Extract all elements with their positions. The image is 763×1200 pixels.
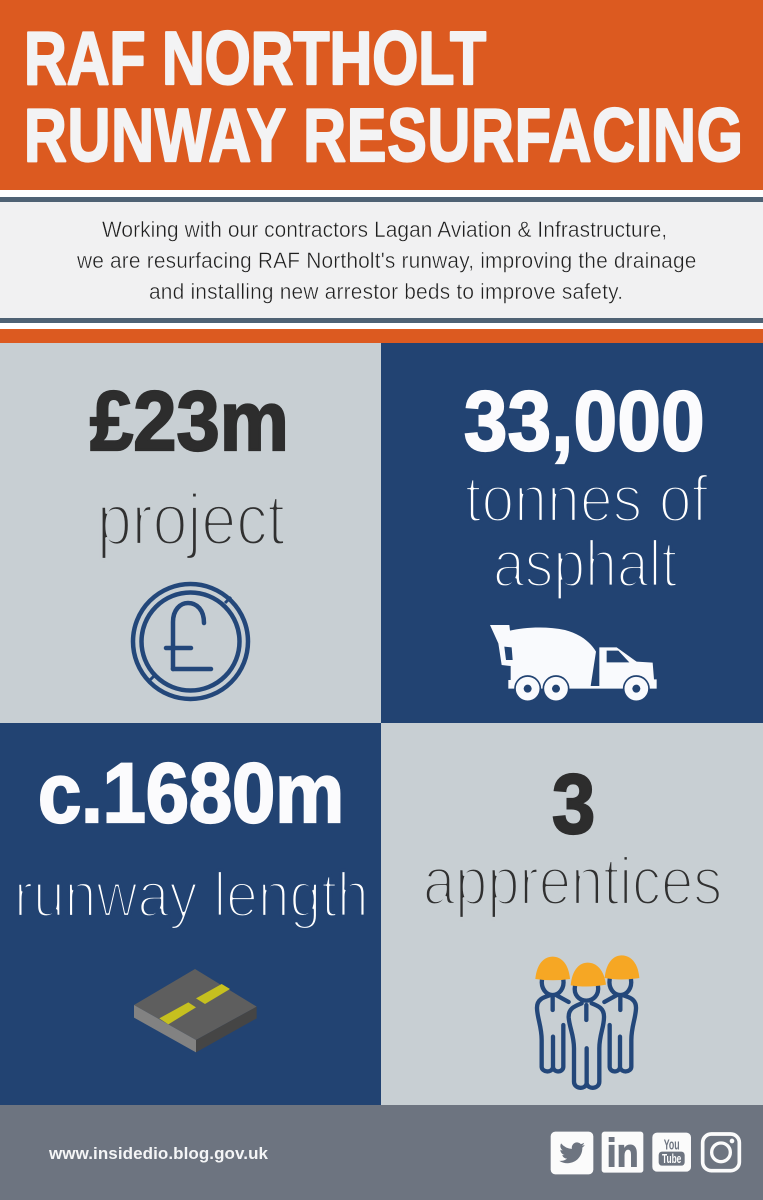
icon: twitter [551, 1132, 593, 1174]
icon: three workers in hard hats [535, 955, 639, 1088]
title: RUNWAY RESURFACING [24, 94, 743, 178]
panel: runway length [0, 723, 381, 1105]
label: tonnes of asphalt [465, 462, 709, 601]
icon: youtube: You [664, 1136, 680, 1153]
footer bar [0, 1105, 763, 1200]
icon: youtube [652, 1133, 691, 1172]
label: tonnes of asphalt: asphalt [493, 528, 677, 601]
social icons [551, 1132, 739, 1176]
title [24, 17, 743, 178]
website url: www.insidedio.blog.gov.uk [48, 1144, 269, 1163]
icon: linkedin: in [607, 1132, 639, 1176]
title: RAF NORTHOLT [24, 17, 486, 101]
intro text [76, 218, 696, 304]
intro text: and installing new arrestor beds to improve safety. [149, 280, 623, 304]
panel: apprentices [381, 723, 763, 1105]
label: tonnes of asphalt: tonnes of [465, 462, 709, 536]
icon: cement mixer truck [490, 625, 657, 701]
title banner [0, 0, 763, 190]
icon: pound coin [133, 584, 248, 699]
figure: 23m: £23m [90, 375, 289, 469]
label: project: project [97, 480, 285, 561]
icon: instagram [703, 1134, 739, 1171]
label: runway length: runway length [14, 860, 369, 930]
orange divider band [0, 329, 763, 343]
figure: 33,000: 33,000 [464, 375, 704, 469]
label: apprentices: apprentices [423, 844, 722, 920]
icon: runway section [134, 969, 257, 1052]
intro text: we are resurfacing RAF Northolt's runway, improving the drainage [76, 249, 696, 273]
icon: youtube: Tube [662, 1152, 681, 1167]
intro text: Working with our contractors Lagan Aviation & Infrastructure, [102, 218, 667, 242]
intro panel [0, 197, 763, 323]
panel: asphalt [381, 343, 763, 723]
figure: c.1680m: c.1680m [38, 747, 344, 841]
panel: project cost [0, 343, 381, 723]
figure: 3: 3 [552, 758, 595, 852]
